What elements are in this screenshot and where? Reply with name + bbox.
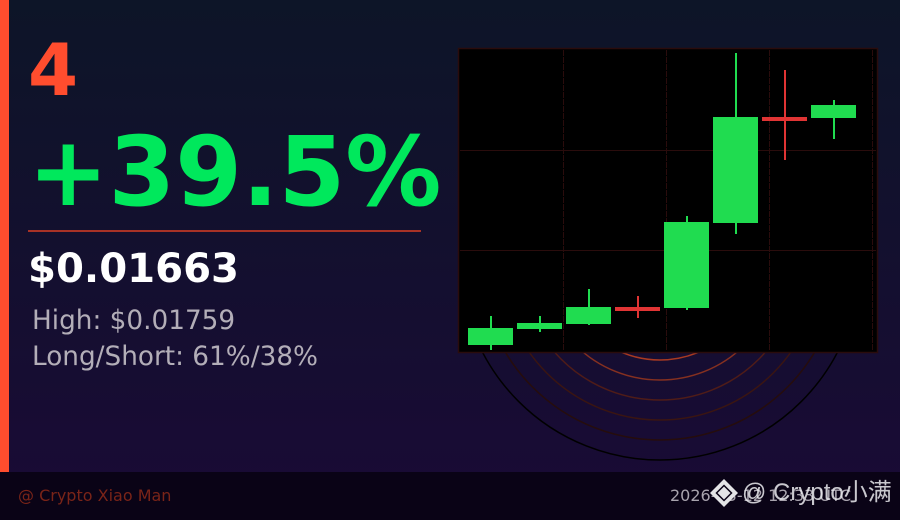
long short ratio: Long/Short: 61%/38% (32, 342, 318, 372)
watermark text: @ Crypto小满 (742, 479, 892, 506)
footer handle: @ Crypto Xiao Man (18, 486, 171, 505)
percentage change: +39.5% (28, 116, 441, 228)
chart frame (458, 48, 878, 352)
rank number: 4 (28, 28, 78, 112)
left accent bar (0, 0, 9, 472)
footer timestamp: 2026-03-12 12:33 UTC (670, 486, 851, 505)
price: $0.01663 (28, 246, 239, 292)
grid lines (460, 50, 876, 351)
high price: High: $0.01759 (32, 306, 235, 336)
divider (28, 230, 421, 232)
footer bar (0, 472, 900, 520)
candles (468, 53, 856, 350)
